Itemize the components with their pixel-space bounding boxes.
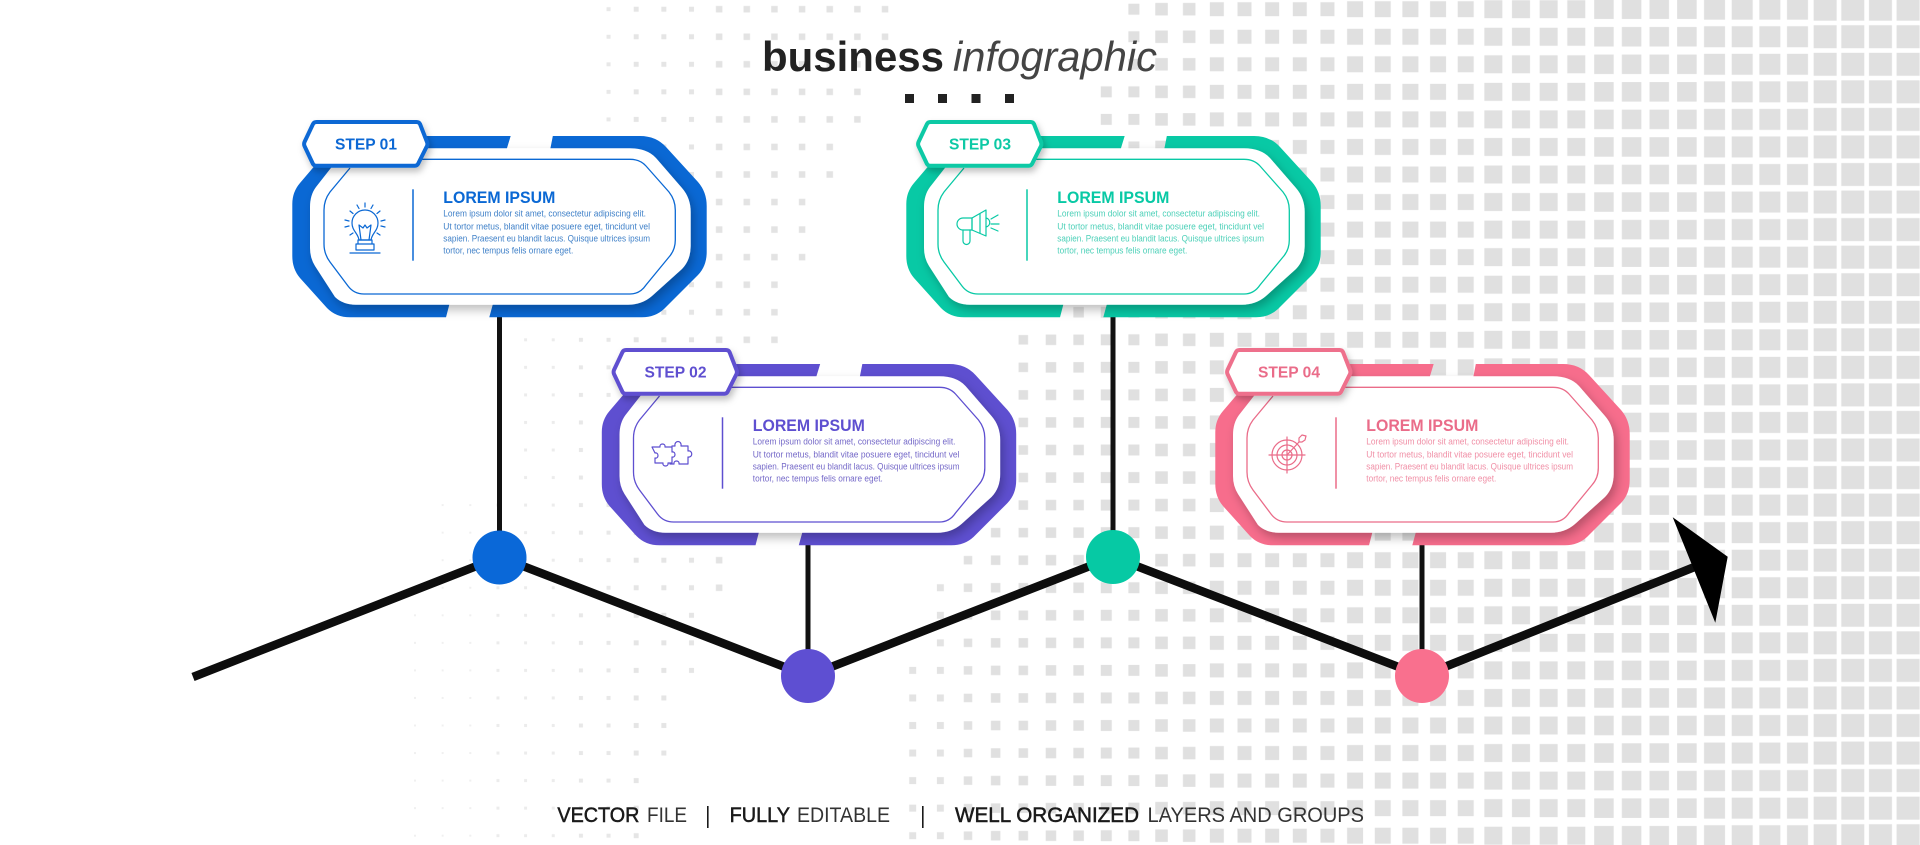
- white inner card: [620, 376, 1000, 533]
- heading: LOREM IPSUM: [1057, 189, 1169, 207]
- panel: step 04: [1215, 350, 1630, 545]
- step tag: STEP 02: [644, 364, 707, 382]
- body text: [1057, 209, 1264, 256]
- white inner card: [924, 148, 1305, 305]
- body text: Lorem ipsum dolor sit amet, consectetur adipiscing elit.: [1366, 437, 1569, 448]
- divider: [722, 417, 724, 489]
- marker: step 3: [1086, 530, 1140, 584]
- icon: light bulb: [345, 203, 385, 253]
- body text: Ut tortor metus, blandit vitae posuere eget, tincidunt vel: [1057, 221, 1264, 232]
- panel: step 03: [906, 122, 1321, 317]
- background: square grid, right side: [899, 0, 1920, 845]
- footer text: FULLY: [730, 804, 790, 827]
- step tag: [304, 122, 427, 166]
- inner outline: [938, 159, 1289, 294]
- heading: LOREM IPSUM: [1366, 417, 1478, 435]
- inner outline: [1247, 387, 1598, 522]
- icon: puzzle: [652, 442, 692, 466]
- timeline zigzag arrow line: [193, 557, 1697, 677]
- icon: target: [1269, 435, 1306, 473]
- white inner card: [310, 148, 691, 305]
- body text: tortor, nec tempus felis ornare eget.: [443, 245, 573, 256]
- body text: sapien. Praesent eu blandit lacus. Quisque ultrices ipsum: [443, 234, 650, 245]
- heading: LOREM IPSUM: [753, 417, 865, 435]
- outer band: [906, 136, 1321, 317]
- footer text: LAYERS AND GROUPS: [1148, 804, 1364, 827]
- step tag: [918, 122, 1041, 166]
- body text: Ut tortor metus, blandit vitae posuere eget, tincidunt vel: [1366, 449, 1573, 460]
- background: dotted grid, left fade: [401, 0, 905, 845]
- body text: Lorem ipsum dolor sit amet, consectetur adipiscing elit.: [1057, 209, 1260, 220]
- body text: sapien. Praesent eu blandit lacus. Quisque ultrices ipsum: [1366, 462, 1573, 473]
- title dots: [905, 94, 1014, 103]
- arrow head: [1673, 517, 1728, 623]
- marker: step 1: [472, 530, 526, 584]
- body text: tortor, nec tempus felis ornare eget.: [1366, 473, 1496, 484]
- panel: step 01: [292, 122, 707, 317]
- body text: [1366, 437, 1573, 484]
- body text: tortor, nec tempus felis ornare eget.: [753, 473, 883, 484]
- footer text: EDITABLE: [797, 804, 890, 827]
- step tag: [1227, 350, 1350, 394]
- body text: [753, 437, 960, 484]
- step tag: [614, 350, 737, 394]
- title: infographic: [953, 33, 1157, 80]
- divider: [412, 189, 414, 261]
- heading: LOREM IPSUM: [443, 189, 555, 207]
- step tag: STEP 01: [335, 136, 397, 154]
- title: business: [762, 33, 944, 80]
- panel: step 02: [602, 350, 1016, 545]
- body text: [443, 209, 650, 256]
- marker: step 2: [781, 649, 835, 703]
- divider: [1026, 189, 1028, 261]
- body text: Ut tortor metus, blandit vitae posuere eget, tincidunt vel: [443, 221, 650, 232]
- divider: [1335, 417, 1337, 489]
- footer text: [557, 804, 1364, 828]
- connector lines: [500, 310, 1422, 676]
- title: [762, 33, 1157, 80]
- footer text: VECTOR: [557, 804, 639, 827]
- body text: Ut tortor metus, blandit vitae posuere eget, tincidunt vel: [753, 449, 960, 460]
- footer text: WELL ORGANIZED: [955, 804, 1139, 827]
- outer band: [292, 136, 707, 317]
- body text: Lorem ipsum dolor sit amet, consectetur adipiscing elit.: [443, 209, 646, 220]
- inner outline: [324, 159, 675, 294]
- white inner card: [1233, 376, 1614, 533]
- step tag: STEP 03: [949, 136, 1011, 154]
- marker: step 4: [1395, 649, 1449, 703]
- outer band: [1215, 364, 1630, 545]
- outer band: [602, 364, 1016, 545]
- body text: sapien. Praesent eu blandit lacus. Quisque ultrices ipsum: [1057, 234, 1264, 245]
- footer text: FILE: [647, 804, 687, 827]
- body text: sapien. Praesent eu blandit lacus. Quisque ultrices ipsum: [753, 462, 960, 473]
- step tag: STEP 04: [1258, 364, 1320, 382]
- inner outline: [634, 387, 985, 522]
- body text: Lorem ipsum dolor sit amet, consectetur adipiscing elit.: [753, 437, 956, 448]
- body text: tortor, nec tempus felis ornare eget.: [1057, 245, 1187, 256]
- icon: megaphone: [957, 210, 999, 244]
